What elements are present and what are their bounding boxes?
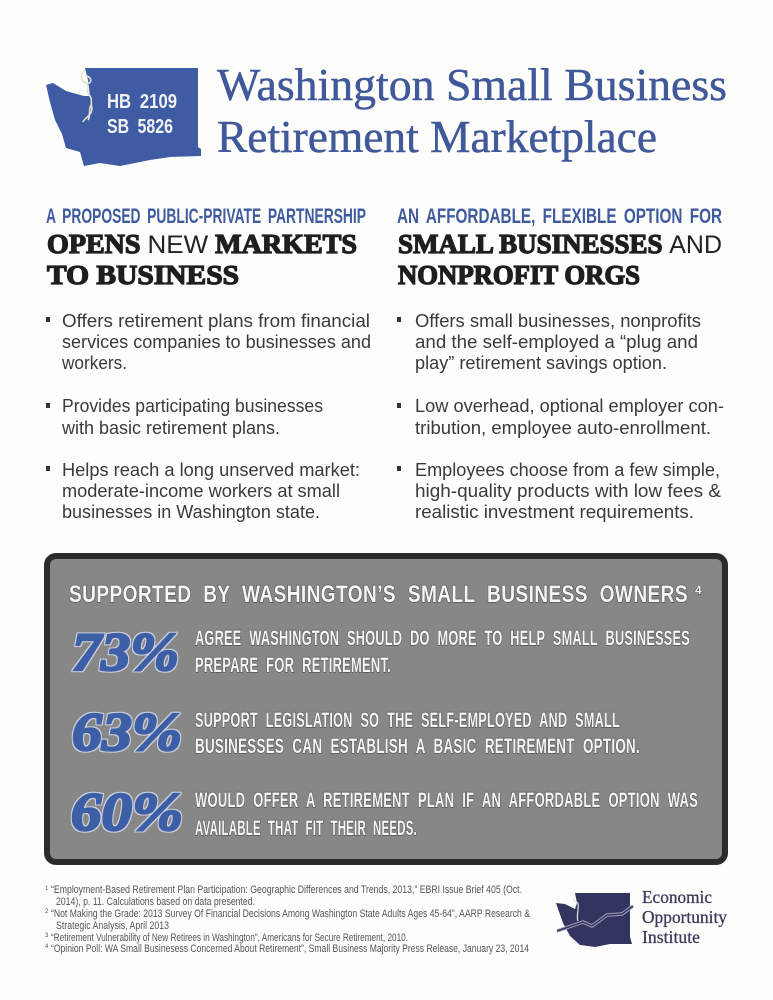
logo: Economic Opportunity Institute: Institute [642, 927, 700, 947]
bullet list: left column: Provides participating businesses [62, 396, 323, 416]
panel heading: 4 [695, 583, 702, 597]
footnotes: “Employment-Based Retirement Plan Participation: Geographic Differences and Trends, 2013,” EBRI Issue Brief 405 (Oct. [51, 884, 522, 896]
bullet list: right column: Low overhead, optional employer con- [415, 396, 724, 416]
footnotes: 2014), p. 11. Calculations based on data presented. [56, 896, 255, 908]
bullet list: left column [46, 311, 371, 522]
footnotes: Strategic Analysis, April 2013 [56, 920, 169, 932]
icon: Washington state map with bill numbers: HB 2109 [107, 91, 177, 113]
heading: right column: SMALL BUSINESSES AND [398, 229, 722, 259]
icon: Washington state map with bill numbers: SB 5826 [107, 116, 173, 138]
title: Retirement Marketplace [217, 111, 657, 162]
title [217, 59, 727, 162]
bullet list: right column: realistic investment requirements. [415, 502, 694, 522]
footnotes: 4 [45, 944, 49, 950]
logo: Economic Opportunity Institute: Economic [642, 887, 712, 907]
heading: right column: NONPROFIT ORGS [398, 260, 640, 290]
bullet list: left column: Helps reach a long unserved market: [62, 460, 360, 480]
heading: left column: TO BUSINESS [47, 260, 239, 290]
stat: 63%: 63% [72, 702, 182, 762]
stat: 73%: 73% [72, 622, 179, 682]
bullet list: left column: with basic retirement plans. [61, 418, 280, 438]
logo: Economic Opportunity Institute: Opportunity [642, 907, 727, 927]
panel: supported by small business owners [47, 556, 725, 862]
bullet list: right column: high-quality products with low fees & [415, 481, 721, 501]
bullet list: right column: and the self-employed a “plug and [415, 332, 698, 352]
icon: Washington state map with bill numbers [46, 68, 201, 166]
bullet list: left column: moderate-income workers at small [62, 481, 340, 501]
bullet list: left column: Offers retirement plans from financial [62, 311, 370, 331]
stat: 60%: 60% [71, 782, 183, 842]
bullet list: right column [397, 311, 724, 522]
footnotes: 1 [45, 886, 49, 892]
bullet list: left column: workers. [61, 353, 127, 373]
footnotes: “Retirement Vulnerability of New Retirees in Washington”, Americans for Secure Retirement, 2010. [51, 932, 408, 944]
footnotes: 3 [45, 933, 49, 939]
bullet list: right column: Employees choose from a few simple, [415, 460, 720, 480]
bullet list: left column: services companies to businesses and [62, 332, 371, 352]
stat: 63% [72, 702, 640, 762]
bullet list: right column: Offers small businesses, nonprofits [415, 311, 701, 331]
logo: Economic Opportunity Institute [556, 887, 727, 947]
footnotes: “Not Making the Grade: 2013 Survey Of Financial Decisions Among Washington State Adults Ages 45-64”, AARP Research & [51, 908, 531, 920]
bullet list: right column: tribution, employee auto-enrollment. [415, 418, 711, 438]
heading: left column: A PROPOSED PUBLIC-PRIVATE PARTNERSHIP [46, 205, 366, 228]
title: Washington Small Business [217, 59, 727, 110]
footnotes: “Opinion Poll: WA Small Businesess Concerned About Retirement”, Small Business Majority Press Release, January 23, 2014 [51, 943, 529, 955]
footnotes [45, 884, 531, 955]
stat: 60% [71, 782, 698, 842]
bullet list: left column: businesses in Washington state. [62, 502, 320, 522]
footnotes: 2 [45, 909, 49, 915]
heading: right column [397, 205, 722, 290]
stat: 73% [72, 622, 690, 682]
bullet list: right column: play” retirement savings option. [415, 353, 667, 373]
stat: 73%: PREPARE FOR RETIREMENT. [195, 654, 391, 677]
heading: left column [46, 205, 366, 290]
stat: 60%: AVAILABLE THAT FIT THEIR NEEDS. [195, 817, 417, 840]
heading: left column: OPENS NEW MARKETS [47, 229, 357, 259]
